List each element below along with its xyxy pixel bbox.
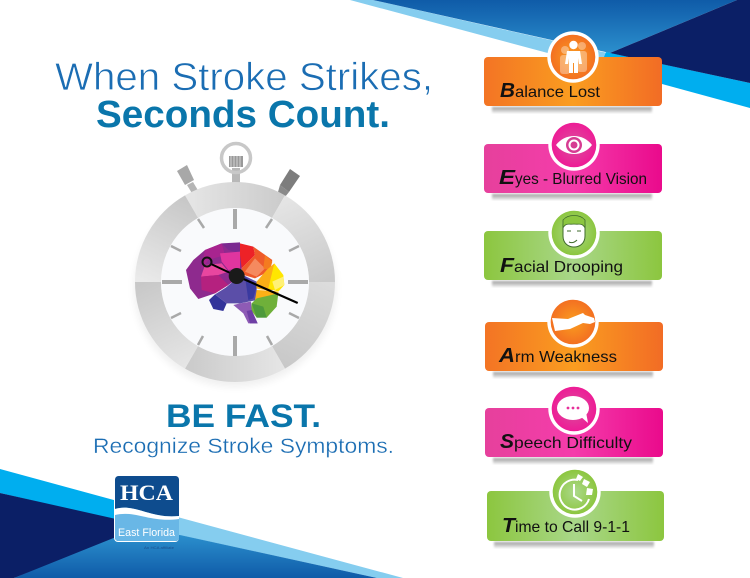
- clock hands: [202, 258, 298, 303]
- bottom left corner banner: [0, 469, 403, 578]
- card: Eyes - Blurred Vision: yes - Blurred Vision: [515, 171, 647, 188]
- crown: [222, 144, 250, 184]
- title: Seconds Count.: [96, 94, 390, 136]
- tick marks: [162, 209, 308, 356]
- slogan: BE FAST.: [166, 398, 321, 434]
- card: Eyes - Blurred Vision: E: [499, 167, 516, 189]
- slogan: Recognize Stroke Symptoms.: [93, 435, 394, 458]
- card: Arm Weakness: [485, 296, 663, 378]
- card: Time to Call 9-1-1: ime to Call 9-1-1: [515, 519, 630, 536]
- logo: HCA East Florida: An HCA affiliate: [144, 545, 175, 550]
- card: Balance Lost: B: [500, 80, 515, 102]
- bezel ring: [135, 182, 335, 382]
- icon: face: [563, 216, 585, 247]
- card: Arm Weakness: A: [498, 345, 515, 367]
- card: Facial Drooping: F: [500, 255, 515, 277]
- title: When Stroke Strikes,: [55, 56, 433, 99]
- card: Balance Lost: alance Lost: [515, 84, 601, 101]
- stopwatch: [134, 144, 336, 387]
- icon: person: [560, 41, 587, 74]
- card: Speech Difficulty: peech Difficulty: [514, 435, 632, 452]
- top right corner banner: [350, 0, 750, 108]
- logo: HCA East Florida: HCA: [120, 480, 173, 505]
- logo: HCA East Florida: East Florida: [118, 527, 176, 539]
- card: Time to Call 9-1-1: T: [502, 515, 517, 537]
- icon: arm: [552, 313, 595, 331]
- left button: [177, 165, 199, 195]
- logo: HCA East Florida: [114, 476, 179, 550]
- card: Facial Drooping: acial Drooping: [514, 259, 623, 276]
- card: Eyes - Blurred Vision: [484, 119, 662, 200]
- card: Time to Call 9-1-1: [487, 466, 664, 548]
- slogan: [93, 398, 394, 458]
- brain: [186, 242, 284, 323]
- card: Speech Difficulty: S: [500, 431, 515, 453]
- card: Balance Lost: [484, 31, 662, 113]
- card: Speech Difficulty: [485, 383, 663, 464]
- icon: clock with arrows: [560, 474, 593, 510]
- card: Arm Weakness: rm Weakness: [515, 349, 617, 366]
- clock face: [161, 208, 309, 356]
- title: [55, 56, 433, 136]
- icon: eye: [556, 136, 592, 154]
- icon: speech bubble: [557, 396, 589, 423]
- right button: [278, 169, 300, 197]
- card: Facial Drooping: [484, 207, 662, 287]
